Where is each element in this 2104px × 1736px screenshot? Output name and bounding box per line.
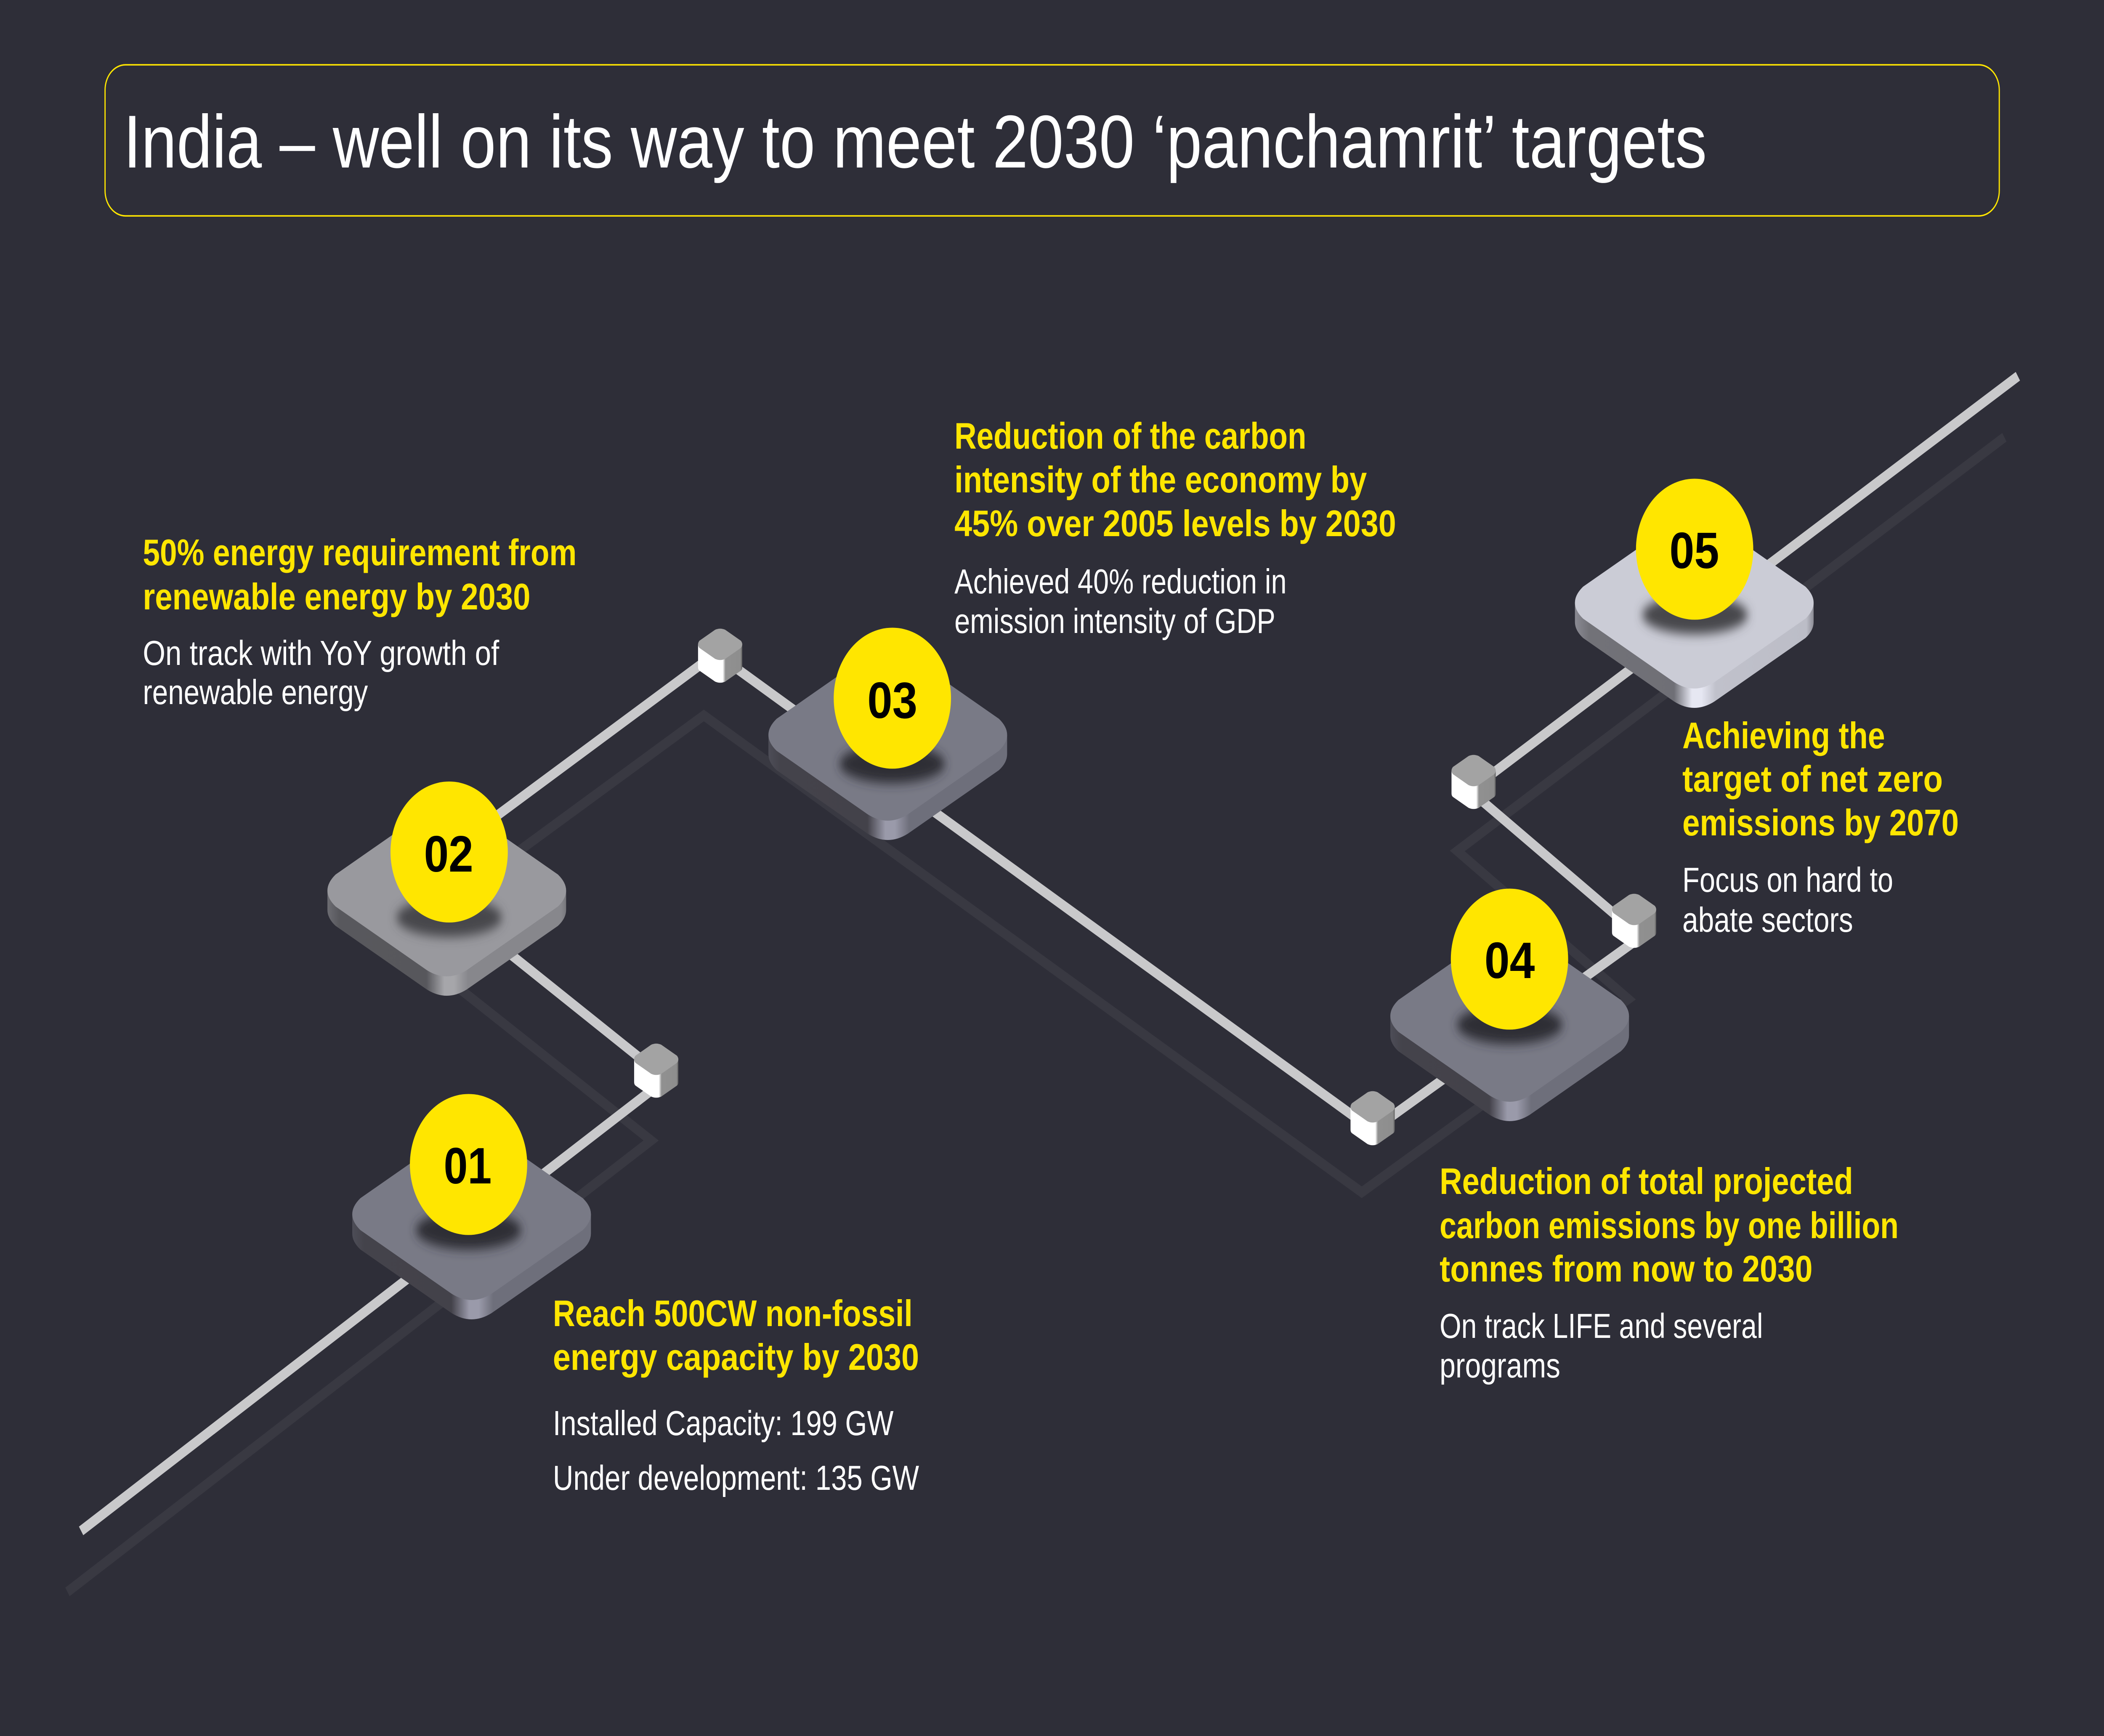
- text block 04: On track LIFE and several: [1440, 1306, 1763, 1345]
- text block 03: [954, 415, 1396, 641]
- badge 03: 03: [867, 672, 917, 729]
- platform 03: [768, 628, 1007, 840]
- text block 05: Achieving the: [1682, 715, 1885, 756]
- text block 01: Under development: 135 GW: [553, 1458, 919, 1497]
- platform 02: [327, 782, 566, 996]
- text block 02: 50% energy requirement from: [143, 532, 576, 573]
- text block 03: Reduction of the carbon: [954, 415, 1306, 457]
- text block 02: [143, 532, 576, 712]
- badge 02: [391, 782, 508, 922]
- text block 04: Reduction of total projected: [1440, 1161, 1853, 1202]
- shadow path line: [67, 437, 2004, 1592]
- badge 02: 02: [424, 825, 473, 883]
- text block 04: carbon emissions by one billion: [1440, 1205, 1899, 1246]
- title box: [105, 65, 1999, 216]
- icon: connector cube 1: [634, 1044, 678, 1098]
- icon: connector cube 3: [1350, 1091, 1395, 1145]
- text block 01: Installed Capacity: 199 GW: [553, 1404, 893, 1443]
- text block 02: On track with YoY growth of: [143, 633, 499, 673]
- badge 05: 05: [1669, 522, 1719, 579]
- badge 04: 04: [1485, 932, 1535, 989]
- platform 04: [1390, 889, 1629, 1121]
- badge 04: [1451, 889, 1568, 1029]
- text block 01: [553, 1293, 919, 1497]
- text block 05: target of net zero: [1682, 758, 1943, 800]
- text block 03: Achieved 40% reduction in: [954, 562, 1287, 601]
- text block 01: Reach 500CW non-fossil: [553, 1293, 913, 1334]
- text block 05: emissions by 2070: [1682, 802, 1959, 843]
- text block 03: 45% over 2005 levels by 2030: [954, 503, 1396, 544]
- icon: connector cube 2: [698, 629, 742, 683]
- badge 05: [1636, 479, 1753, 619]
- text block 04: [1440, 1161, 1899, 1385]
- text block 01: energy capacity by 2030: [553, 1337, 919, 1378]
- text block 05: [1682, 715, 1959, 939]
- title: India – well on its way to meet 2030 ‘panchamrit’ targets: [123, 100, 1707, 184]
- text block 02: renewable energy: [143, 673, 368, 712]
- badge 01: [410, 1094, 527, 1235]
- main path line: [81, 376, 2018, 1531]
- platform 01: [352, 1094, 591, 1319]
- badge 03: [834, 628, 951, 768]
- text block 05: Focus on hard to: [1682, 860, 1893, 899]
- text block 02: renewable energy by 2030: [143, 576, 531, 617]
- text block 03: emission intensity of GDP: [954, 601, 1275, 641]
- text block 04: tonnes from now to 2030: [1440, 1248, 1813, 1289]
- badge 01: 01: [444, 1137, 491, 1194]
- text block 03: intensity of the economy by: [954, 459, 1367, 500]
- icon: connector cube 4: [1612, 894, 1656, 948]
- icon: connector cube 5: [1451, 755, 1496, 809]
- text block 04: programs: [1440, 1346, 1560, 1385]
- text block 05: abate sectors: [1682, 900, 1853, 939]
- platform 05: [1575, 479, 1814, 708]
